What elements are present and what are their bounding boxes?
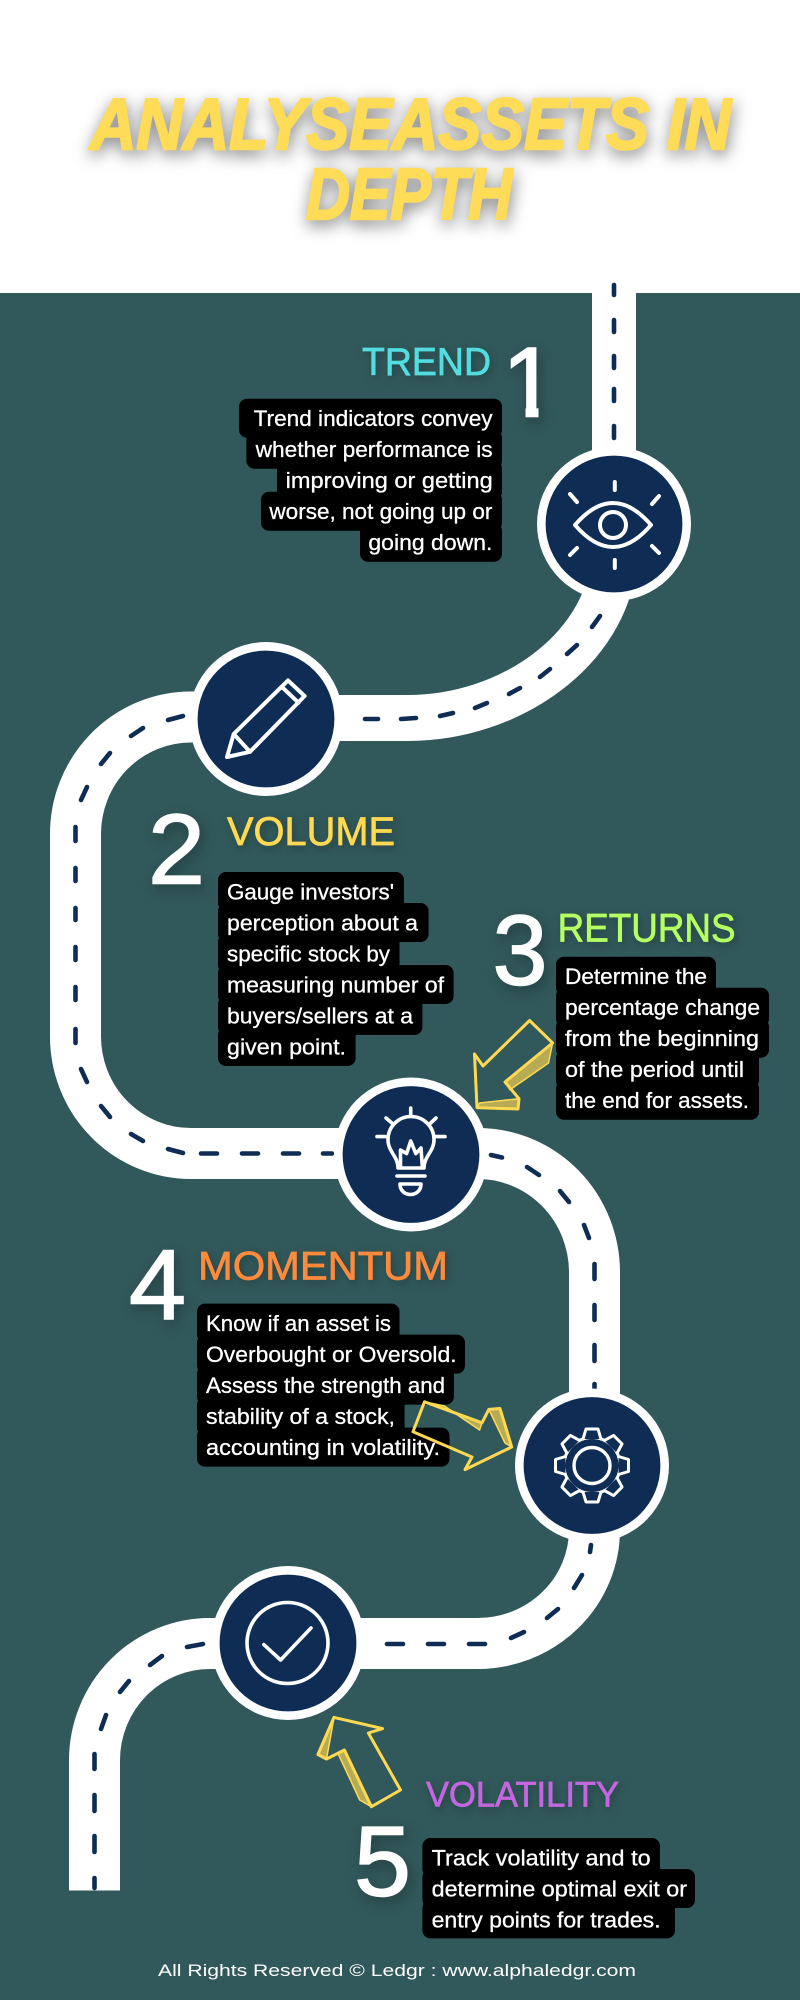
text block: returns: of the period until [565,1057,744,1082]
text block: momentum: Assess the strength and [206,1373,445,1398]
arrow pointing at bulb [474,1020,553,1109]
title [88,85,733,235]
text block: returns [556,957,769,1120]
text block: volume [218,872,454,1066]
text block: momentum: Overbought or Oversold. [206,1342,457,1367]
step 4: momentum [129,1229,669,1542]
text block: momentum: Know if an asset is [206,1311,391,1336]
arrow pointing at check [318,1717,400,1807]
heading: volume: VOLUME [227,810,395,854]
icon: eye [537,447,691,601]
icon: gear [515,1388,669,1542]
text block: volume: Gauge investors' [227,880,394,904]
text block: trend [239,399,502,562]
heading: trend: TREND [362,341,491,384]
number 3: 3 [492,894,548,1006]
step 2: volume [148,642,454,1066]
number 5: 5 [354,1806,411,1916]
heading: volatility: VOLATILITY [426,1775,619,1815]
winding road [75,282,614,1890]
text block: returns: from the beginning [565,1026,759,1051]
icon: pencil [189,642,343,796]
step 3: returns [334,894,769,1232]
text block: returns: percentage change [565,995,760,1020]
text block: volume: buyers/sellers at a [227,1004,414,1028]
arrow pointing at gear [413,1402,512,1470]
icon: light bulb [334,1078,488,1232]
text block: trend: improving or getting [286,468,493,493]
heading: returns: RETURNS [558,906,736,950]
text block: trend: Trend indicators convey [254,406,493,431]
text block: returns: the end for assets. [565,1088,749,1113]
text block: trend: whether performance is [255,437,493,462]
icon: check mark [211,1566,365,1720]
text block: volume: measuring number of [227,972,445,998]
text block: volatility: Track volatility and to [432,1846,651,1870]
number 1: 1 [502,326,557,438]
step 5: volatility [211,1566,695,1938]
text block: volatility: determine optimal exit or [432,1876,687,1902]
text block: trend: going down. [368,530,492,555]
number 2: 2 [148,794,205,904]
text block: volume: perception about a [227,910,419,936]
title: DEPTH [306,155,514,235]
text block: momentum [197,1304,465,1467]
text block: momentum: stability of a stock, [206,1404,395,1429]
text block: momentum: accounting in volatility. [206,1435,440,1460]
heading: momentum: MOMENTUM [198,1244,448,1288]
text block: volatility: entry points for trades. [432,1908,661,1932]
text block: volume: given point. [227,1034,346,1060]
number 4: 4 [129,1229,186,1340]
text block: volume: specific stock by [227,942,390,966]
title: ANALYSEASSETS IN [88,85,733,165]
step 1: trend [239,326,691,601]
text block: returns: Determine the [565,964,707,989]
text block: trend: worse, not going up or [268,499,492,524]
text block: volatility [422,1838,695,1938]
footer: All Rights Reserved © Ledgr : www.alphaledgr.com [158,1961,636,1980]
road centre dashes [76,285,614,1888]
